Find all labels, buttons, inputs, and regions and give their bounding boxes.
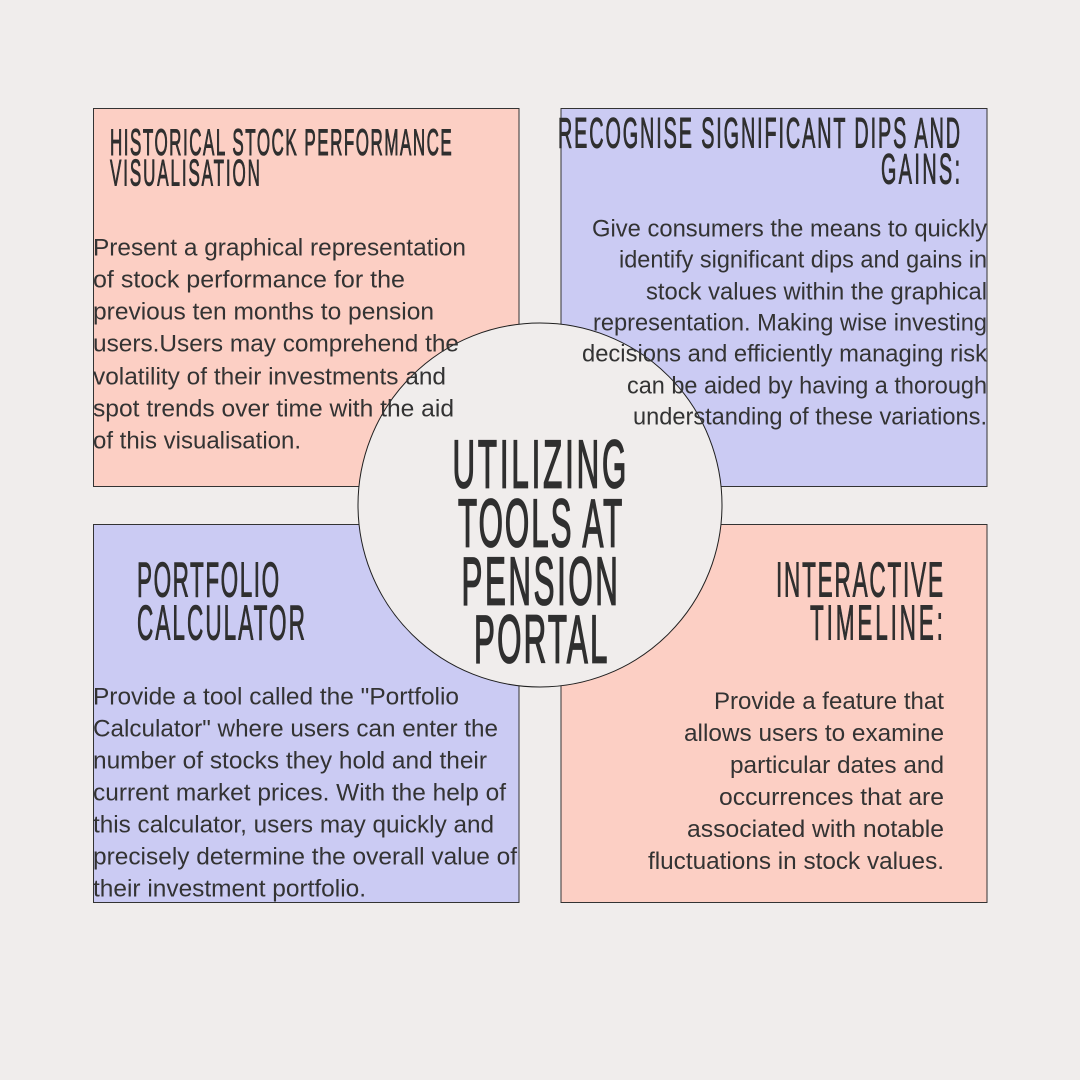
text: recognise dips and gains body: Give consumers the means to quickly [592, 216, 987, 242]
heading: portfolio calculator: CALCULATOR [137, 596, 305, 651]
text: recognise dips and gains body: understanding of these variations. [633, 404, 987, 430]
text: recognise dips and gains body: identify significant dips and gains in [619, 246, 987, 274]
heading: portfolio calculator [137, 553, 305, 651]
text: interactive timeline body: particular dates and [730, 752, 944, 779]
heading: recognise significant dips and gains: RECOGNISE SIGNIFICANT DIPS AND [558, 110, 960, 158]
title: utilizing tools at pension portal: UTILIZING [452, 427, 626, 503]
panel: interactive timeline background [561, 524, 987, 902]
text: portfolio calculator body: this calculator, users may quickly and [93, 812, 494, 838]
text: interactive timeline body: allows users to examine [684, 720, 944, 747]
heading: portfolio calculator: PORTFOLIO [137, 553, 279, 608]
heading: historical stock performance: HISTORICAL STOCK PERFORMANCE [110, 123, 452, 164]
text: recognise dips and gains body: representation. Making wise investing [593, 310, 987, 336]
text: recognise dips and gains body: can be aided by having a thorough [627, 372, 987, 400]
text: historical stock performance body [93, 234, 466, 454]
text: portfolio calculator body: number of stocks they hold and their [93, 748, 487, 774]
title: utilizing tools at pension portal: PENSION [462, 544, 618, 620]
text: portfolio calculator body: Provide a tool called the "Portfolio [93, 684, 459, 710]
heading: interactive timeline: TIMELINE: [810, 596, 943, 651]
text: historical stock performance body: of stock performance for the [93, 266, 405, 294]
text: interactive timeline body [648, 688, 944, 875]
panel: portfolio calculator background [94, 524, 519, 902]
heading: recognise significant dips and gains [558, 110, 960, 194]
text: portfolio calculator body [93, 684, 517, 902]
text: portfolio calculator body: current market prices. With the help of [93, 780, 506, 806]
heading: historical stock performance [110, 123, 452, 195]
title: utilizing tools at pension portal: PORTAL [474, 602, 607, 678]
heading: recognise significant dips and gains: GAINS: [881, 146, 960, 194]
text: historical stock performance body: previous ten months to pension [93, 298, 434, 326]
text: interactive timeline body: Provide a feature that [714, 688, 944, 715]
heading: interactive timeline: INTERACTIVE [776, 553, 943, 608]
text: portfolio calculator body: their investment portfolio. [93, 876, 366, 902]
text: recognise dips and gains body: stock values within the graphical [646, 278, 987, 306]
text: interactive timeline body: fluctuations in stock values. [648, 848, 944, 875]
title: utilizing tools at pension portal [452, 427, 626, 678]
heading: historical stock performance: VISUALISATION [110, 154, 260, 195]
text: portfolio calculator body: Calculator" where users can enter the [93, 716, 498, 742]
title: utilizing tools at pension portal: TOOLS AT [458, 486, 622, 562]
text: historical stock performance body: volatility of their investments and [93, 364, 446, 390]
central circle [358, 323, 722, 687]
text: historical stock performance body: Present a graphical representation [93, 234, 466, 262]
heading: interactive timeline [776, 553, 943, 651]
text: interactive timeline body: associated with notable [687, 816, 944, 843]
panel: historical stock performance background [94, 108, 519, 486]
text: recognise dips and gains body: decisions and efficiently managing risk [582, 340, 988, 368]
panel: recognise dips and gains background [561, 108, 987, 486]
text: historical stock performance body: spot trends over time with the aid [93, 396, 454, 422]
text: interactive timeline body: occurrences that are [719, 784, 944, 811]
text: recognise dips and gains body [582, 216, 988, 430]
text: portfolio calculator body: precisely determine the overall value of [93, 844, 517, 870]
text: historical stock performance body: of this visualisation. [93, 428, 301, 454]
text: historical stock performance body: users.Users may comprehend the [93, 330, 459, 358]
